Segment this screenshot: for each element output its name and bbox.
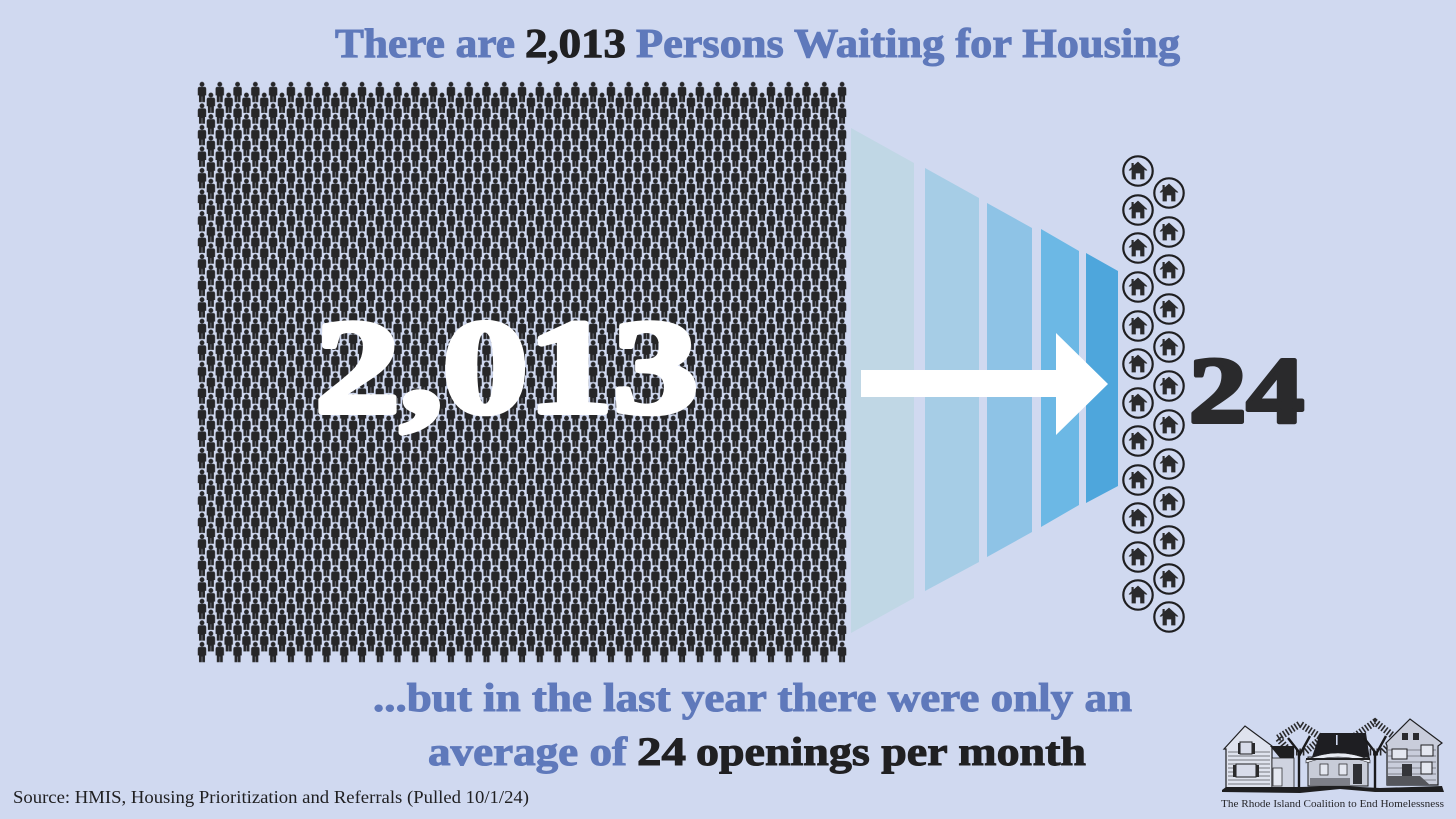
arrow xyxy=(861,333,1108,435)
subtitle: openings per month xyxy=(696,729,1086,774)
logo drawing: row of houses xyxy=(1222,719,1444,793)
title xyxy=(335,20,1181,66)
title: There are xyxy=(335,20,515,66)
subtitle xyxy=(373,675,1132,774)
subtitle: average of xyxy=(428,729,628,774)
house icons: left column xyxy=(1123,156,1153,610)
subtitle: ...but in the last year there were only an xyxy=(373,675,1132,720)
source note: Source: HMIS, Housing Prioritization and Referrals (Pulled 10/1/24) xyxy=(13,787,529,808)
large number: 2,013: 2,013 xyxy=(315,293,698,441)
title: 2,013 xyxy=(525,20,626,66)
subtitle: 24 xyxy=(637,729,686,774)
title: Persons Waiting for Housing xyxy=(636,20,1181,66)
house icons: right column xyxy=(1154,178,1184,632)
funnel of narrowing bands xyxy=(851,128,1118,633)
logo caption: The Rhode Island Coalition to End Homelessness xyxy=(1221,799,1444,810)
large number: 24: 24 xyxy=(1189,339,1304,443)
pictogram: grid of people waiting xyxy=(193,81,851,663)
logo: Rhode Island Coalition to End Homelessness xyxy=(1221,719,1444,810)
